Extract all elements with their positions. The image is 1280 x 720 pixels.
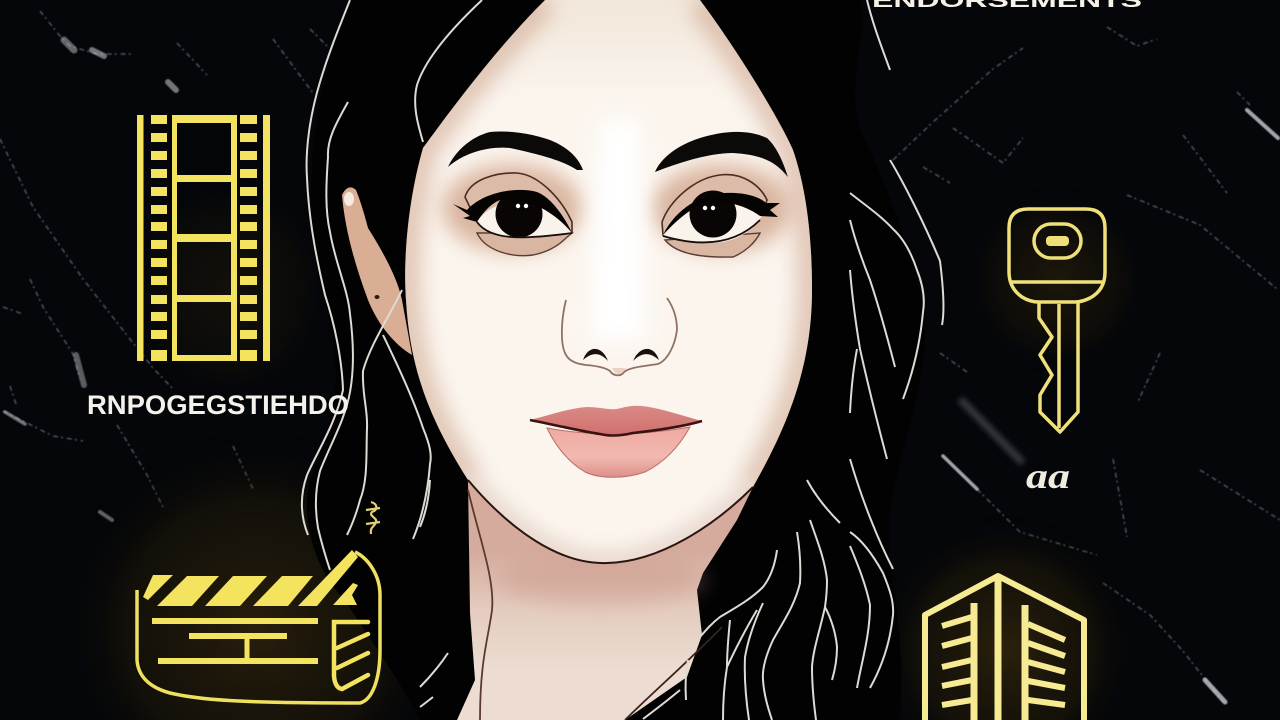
icon: clapperboard — [137, 550, 380, 703]
label: film icon caption: RNPOGEGSTIEHDO — [87, 390, 349, 420]
neck and chest — [457, 480, 753, 720]
nose — [562, 298, 677, 375]
jaw line — [468, 480, 753, 563]
label: key icon caption: aa — [1026, 456, 1070, 496]
ear — [342, 187, 412, 355]
right eye — [662, 175, 780, 257]
hair mass — [307, 0, 925, 720]
portrait — [302, 0, 943, 720]
white hair strands — [302, 0, 943, 720]
left brow — [448, 131, 583, 170]
icon: film strip — [137, 115, 270, 361]
icon: building — [925, 576, 1084, 720]
face — [405, 0, 812, 563]
icon glows — [55, 170, 1152, 720]
lips — [530, 406, 702, 477]
left eye — [453, 173, 572, 256]
right brow — [655, 132, 788, 177]
earring — [366, 502, 380, 534]
icon: key — [1009, 209, 1105, 432]
